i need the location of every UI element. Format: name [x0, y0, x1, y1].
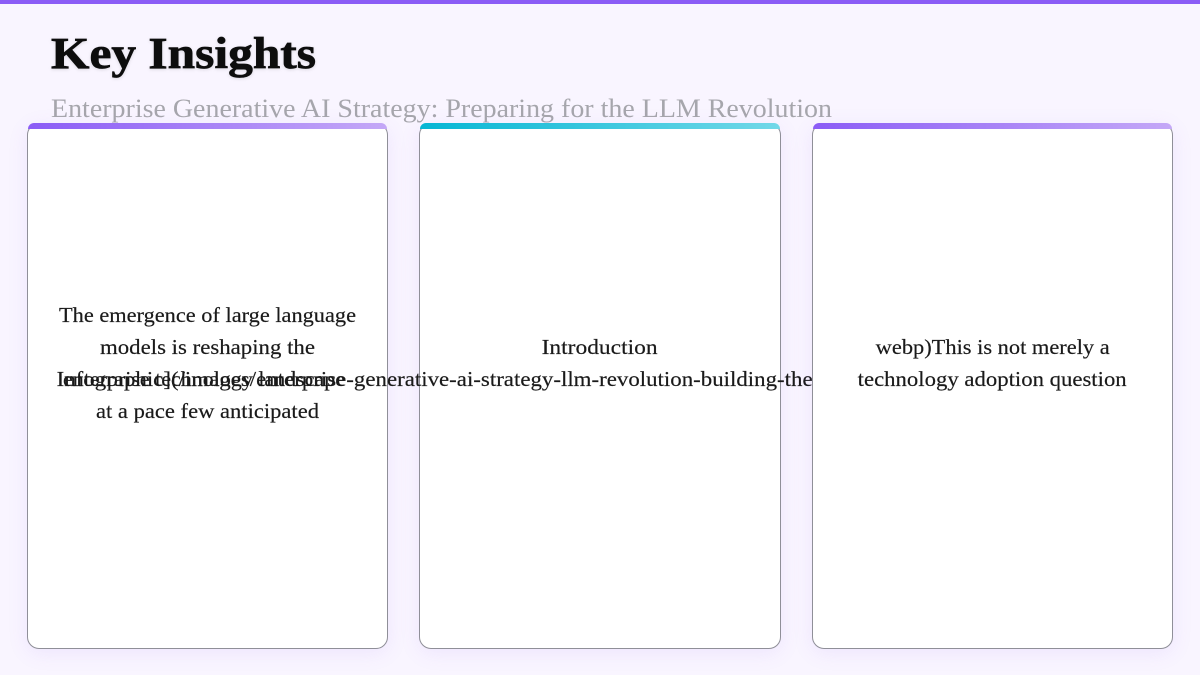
- subtitle: Enterprise Generative AI Strategy: Preparing for the LLM Revolution: [51, 94, 832, 123]
- card 3 text: technology adoption question: [858, 367, 1127, 391]
- card 2 text: Introduction: [542, 335, 658, 359]
- card 2 top accent: [420, 123, 780, 129]
- panel: card 3: [812, 123, 1173, 649]
- card 3 text: webp)This is not merely a: [876, 335, 1110, 359]
- header: title and subtitle: [51, 29, 832, 123]
- card 1 text: The emergence of large language: [59, 303, 356, 327]
- card 1 top accent: [28, 123, 387, 129]
- card 1 text: enterprise technology landscape: [63, 367, 345, 391]
- top accent bar: [0, 0, 1200, 4]
- card 2 text: [57, 335, 813, 391]
- panel: card 1: [27, 123, 388, 649]
- title: Key Insights: [51, 29, 316, 78]
- card 1 text: at a pace few anticipated: [96, 399, 319, 423]
- card 1 text: [59, 303, 356, 423]
- panel: card 2: [419, 123, 781, 649]
- card 3 text: [858, 335, 1127, 391]
- text: Infographic](/images/enterprise-generative-ai-strategy-llm-revolution-building-the: [57, 367, 813, 391]
- card 3 top accent: [813, 123, 1172, 129]
- card 1 text: models is reshaping the: [100, 335, 315, 359]
